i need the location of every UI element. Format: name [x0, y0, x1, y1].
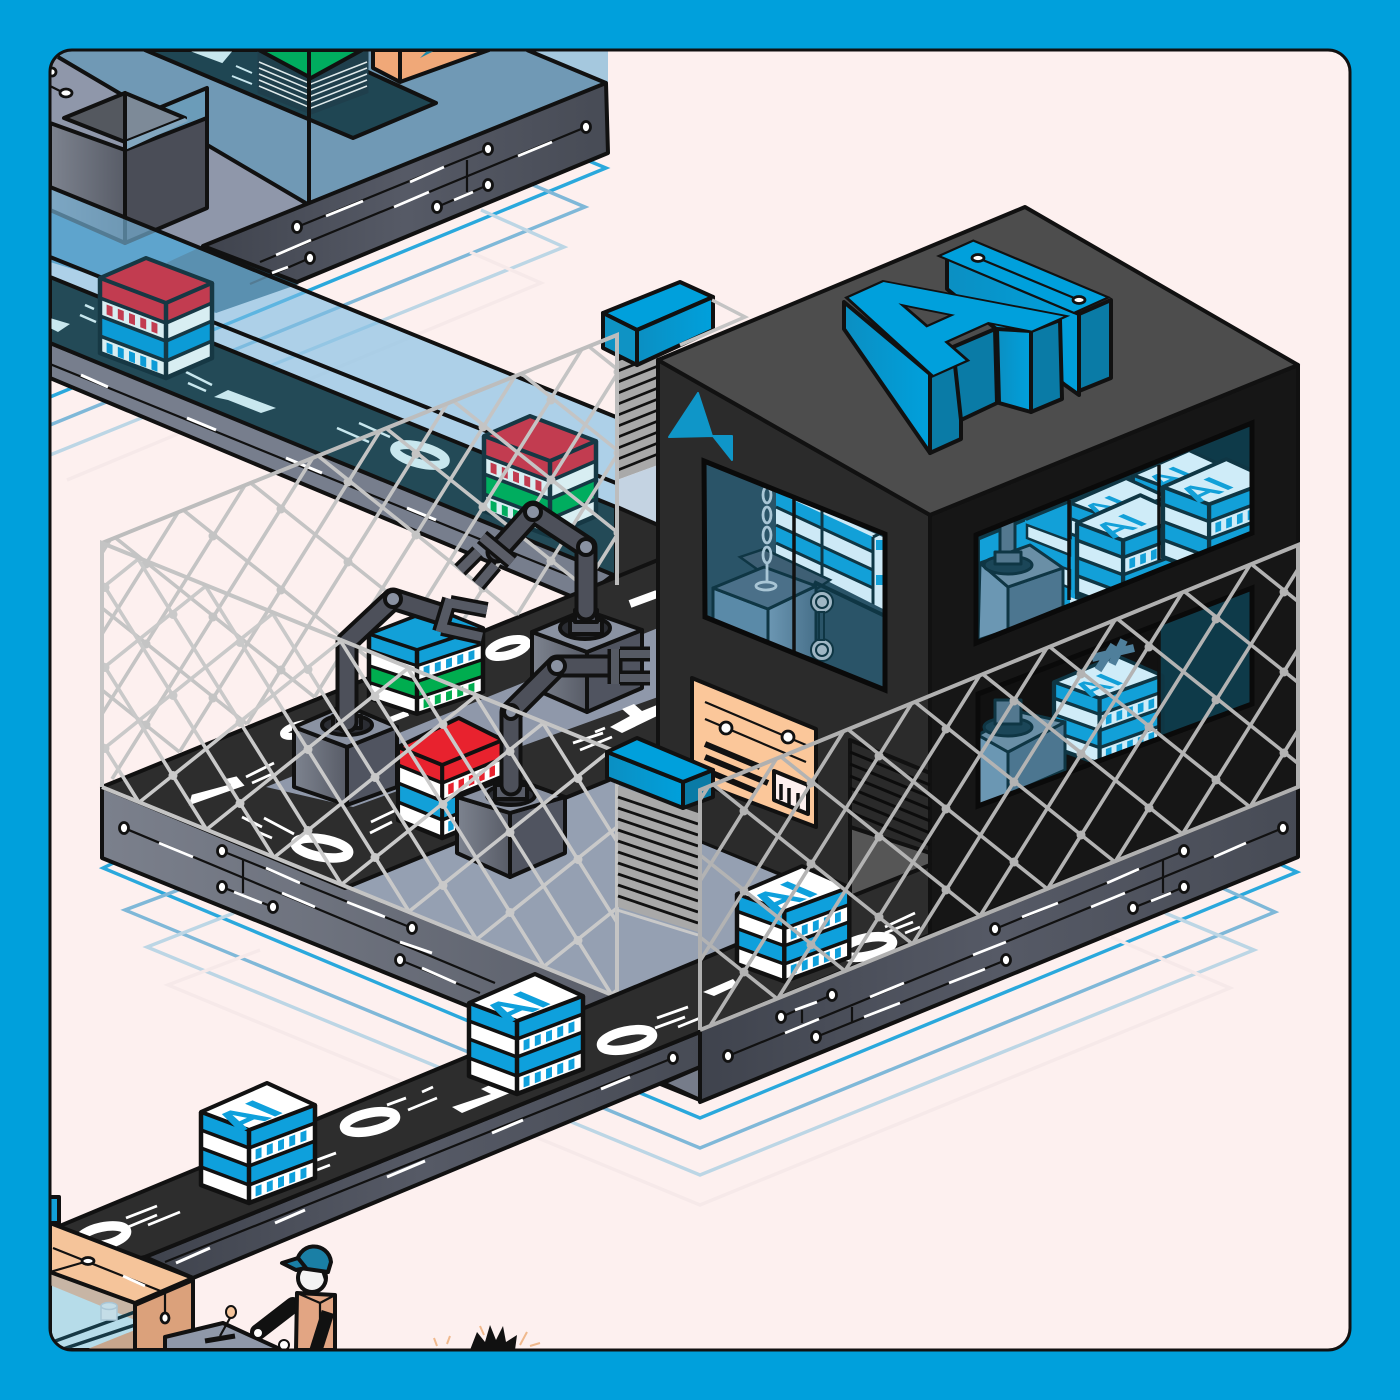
- robot arm A: [347, 591, 487, 722]
- logo on wall: [669, 393, 732, 460]
- side of upper platform: [203, 83, 608, 282]
- front crate window 2: [1077, 495, 1186, 610]
- lower conveyor side strip: [145, 1032, 700, 1278]
- AI crate 1 label: AI: [201, 1096, 295, 1136]
- dark conveyor pad on upper platform: [145, 50, 436, 138]
- AI crate 2 label: AI: [469, 987, 563, 1027]
- front left fence panel: [0, 466, 882, 1104]
- rollers: [811, 591, 833, 661]
- rear fence stub behind building: [680, 300, 745, 345]
- gripper A: [440, 599, 487, 637]
- front right fence panel: [508, 471, 1400, 1108]
- dark machine box in glass room: [50, 88, 207, 243]
- upper arm B: [497, 512, 586, 610]
- robot machine C: [457, 649, 650, 877]
- rear left crates: [980, 503, 1105, 640]
- lower conveyor road: [50, 960, 710, 1280]
- stacked crates in left window: [776, 490, 885, 610]
- lower left robot machine A: [294, 705, 397, 805]
- ground reflections under upper platform: [50, 161, 606, 480]
- rear conveyor strip: [50, 343, 616, 600]
- green server stack: [259, 50, 367, 113]
- crate red blue: [100, 258, 212, 378]
- small blue item at left edge: [46, 1197, 59, 1223]
- starburst spark: [434, 1325, 540, 1350]
- rear crate far right label: AI: [1137, 463, 1203, 492]
- road mark on upper pad: [190, 50, 252, 84]
- rear conveyor road: [50, 277, 616, 576]
- gripper B: [460, 537, 512, 585]
- machine block in left window: [713, 567, 816, 660]
- rear door column: [619, 358, 658, 574]
- machine in window 2: [978, 520, 1063, 640]
- rear blue header box: [603, 282, 713, 365]
- upper right window: [976, 423, 1272, 643]
- cylinder in station: [101, 1302, 117, 1320]
- gray floor of main platform: [352, 782, 698, 992]
- AI crate 3 label: AI: [736, 877, 830, 917]
- rear fence outline: [102, 335, 617, 585]
- small node on floor: [48, 68, 72, 97]
- side roller door: [850, 740, 930, 900]
- front door slats: [617, 786, 698, 935]
- lower right window: [978, 588, 1252, 806]
- roof letter bolts: [972, 254, 1085, 304]
- crate blue green held by arm: [369, 608, 483, 714]
- right crate window 2: [1163, 459, 1272, 574]
- AI crate 3: [737, 866, 849, 981]
- window mullion: [792, 490, 796, 660]
- AI crate 1: [201, 1083, 315, 1203]
- rear fence panel: [0, 224, 922, 861]
- rear crate centre: [1070, 478, 1167, 580]
- ground reflections under main platform: [103, 855, 1297, 1205]
- circuit traces on left side: [120, 822, 495, 993]
- robot arm machine B: [460, 504, 642, 712]
- main platform left side: [102, 787, 700, 1100]
- control console: [165, 1306, 282, 1350]
- crate red green: [484, 416, 596, 536]
- front right fence outline: [700, 545, 1298, 1030]
- machine lower window: [978, 700, 1065, 806]
- circuit traces on right side: [724, 822, 1288, 1062]
- front crate label: AI: [1083, 510, 1157, 543]
- dark road in right section: [700, 865, 930, 1030]
- right crate label: AI: [1165, 473, 1244, 507]
- orange crate: [373, 50, 489, 82]
- floor band in left window: [814, 582, 885, 616]
- front left fence outline: [102, 543, 617, 997]
- crate in lower window: [1054, 656, 1162, 764]
- building right face: [930, 365, 1298, 935]
- front blue header box: [607, 738, 713, 808]
- roof AI letters extrusion: [844, 258, 1111, 453]
- floor gray in front of wall: [700, 843, 850, 960]
- roof AI letters face: AI: [764, 222, 1152, 391]
- chain: [756, 487, 776, 590]
- rear crate far right: [1133, 450, 1230, 552]
- conveyor on main platform: [102, 560, 658, 888]
- red crate: [398, 718, 503, 838]
- glass bridge over rear road: [50, 187, 616, 510]
- mullions window 2: [1069, 465, 1159, 600]
- gripper over crate: [1092, 640, 1134, 670]
- teal base under glass: [52, 212, 216, 313]
- platform side seen through glass: [166, 246, 299, 313]
- wooden station: [50, 1223, 193, 1350]
- building roof: [658, 207, 1298, 515]
- right platform side: [700, 787, 1298, 1102]
- rear crate centre label: AI: [1073, 492, 1139, 521]
- AI crate 2: [469, 974, 583, 1094]
- building left face: [658, 360, 930, 935]
- circuit traces on upper platform side: [250, 122, 590, 284]
- roof AI letters outline: AI: [764, 222, 1152, 391]
- gripper C: [615, 649, 650, 684]
- building: [658, 207, 1298, 935]
- left window: [704, 461, 885, 690]
- pedestal block B: [532, 610, 642, 712]
- operator figure: [253, 1246, 335, 1350]
- upper platform with glass room: [48, 50, 608, 313]
- wall poster: [692, 678, 816, 827]
- crate in lower window label: AI: [1062, 670, 1132, 701]
- gray floor: [50, 57, 309, 248]
